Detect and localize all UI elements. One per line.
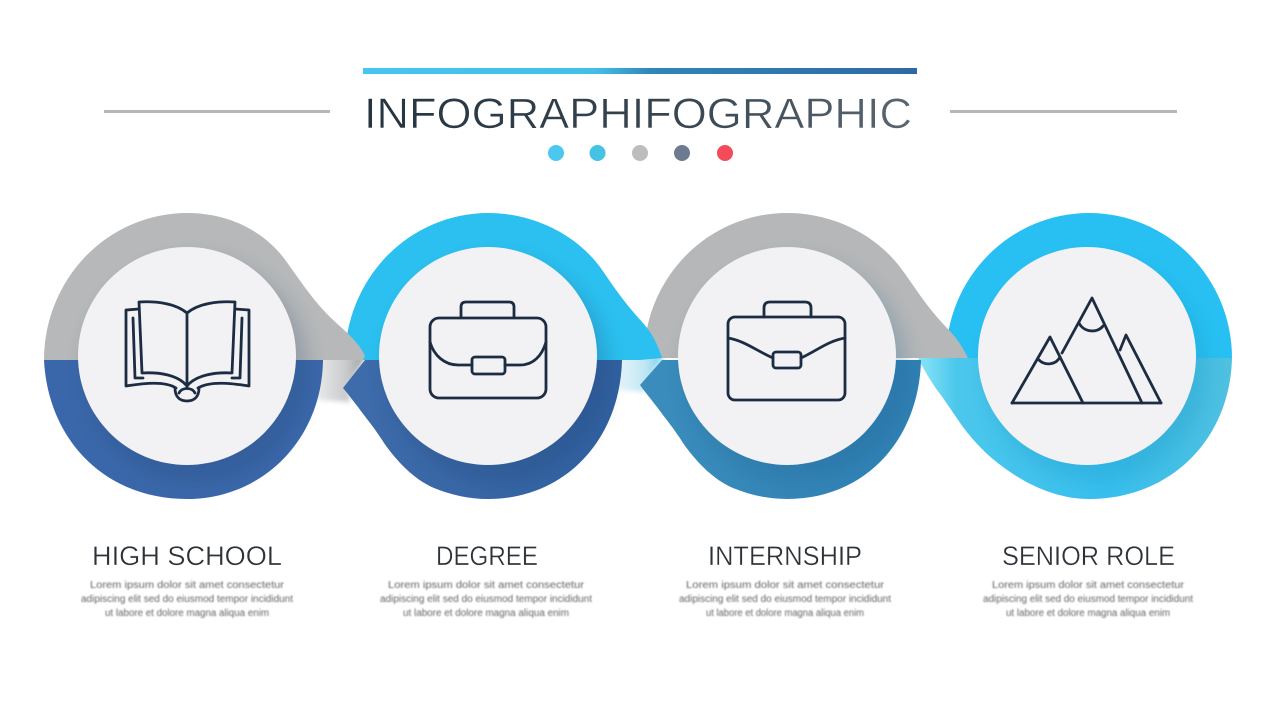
- text block: degree: [380, 580, 592, 619]
- icon: briefcase (internship): [728, 302, 845, 400]
- text block: senior role: [983, 580, 1193, 619]
- text block: degree: ut labore et dolore magna aliqua enim: [403, 608, 569, 619]
- top gradient bar: [363, 68, 917, 74]
- icon: briefcase (degree): [430, 302, 546, 398]
- text block: high school: ut labore et dolore magna aliqua enim: [105, 608, 269, 619]
- text block: senior role: Lorem ipsum dolor sit amet consectetur: [992, 580, 1185, 591]
- right header line: [950, 110, 1177, 113]
- text block: high school: adipiscing elit sed do eiusmod tempor incididunt: [81, 594, 293, 605]
- panel: step 1 high school ring: [44, 213, 365, 499]
- fold shadow between steps 2 and 3: [618, 356, 664, 392]
- panel: step 4 senior role ring: [918, 213, 1232, 499]
- heading: degree: DEGREE: [436, 541, 538, 571]
- text block: degree: adipiscing elit sed do eiusmod tempor incididunt: [380, 594, 592, 605]
- text block: internship: ut labore et dolore magna aliqua enim: [706, 608, 864, 619]
- title colour dots: [548, 145, 733, 161]
- text block: internship: [679, 580, 891, 619]
- heading: high school: HIGH SCHOOL: [92, 541, 282, 571]
- step 4 inner disc: [978, 247, 1196, 465]
- panel: step 2 degree ring: [343, 213, 662, 499]
- fold shadow between steps 1 and 2: [318, 356, 366, 402]
- text block: degree: Lorem ipsum dolor sit amet consectetur: [388, 580, 585, 591]
- icon: open book: [126, 302, 249, 401]
- step 2 inner disc: [379, 247, 597, 465]
- heading: internship: INTERNSHIP: [708, 541, 862, 571]
- text block: high school: Lorem ipsum dolor sit amet consectetur: [90, 580, 285, 591]
- heading: senior role: SENIOR ROLE: [1002, 541, 1175, 571]
- left header line: [104, 110, 330, 113]
- panel: step 3 internship ring: [640, 213, 968, 499]
- text block: internship: adipiscing elit sed do eiusmod tempor incididunt: [679, 594, 891, 605]
- title: INFOGRAPHIFOGRAPHIC: [364, 90, 912, 138]
- step 3 inner disc: [678, 247, 896, 465]
- icon: mountains: [1012, 298, 1161, 403]
- step 1 inner disc: [78, 247, 296, 465]
- text block: senior role: adipiscing elit sed do eiusmod tempor incididunt: [983, 594, 1193, 605]
- text block: senior role: ut labore et dolore magna aliqua enim: [1006, 608, 1170, 619]
- text block: high school: [81, 580, 293, 619]
- text block: internship: Lorem ipsum dolor sit amet consectetur: [686, 580, 885, 591]
